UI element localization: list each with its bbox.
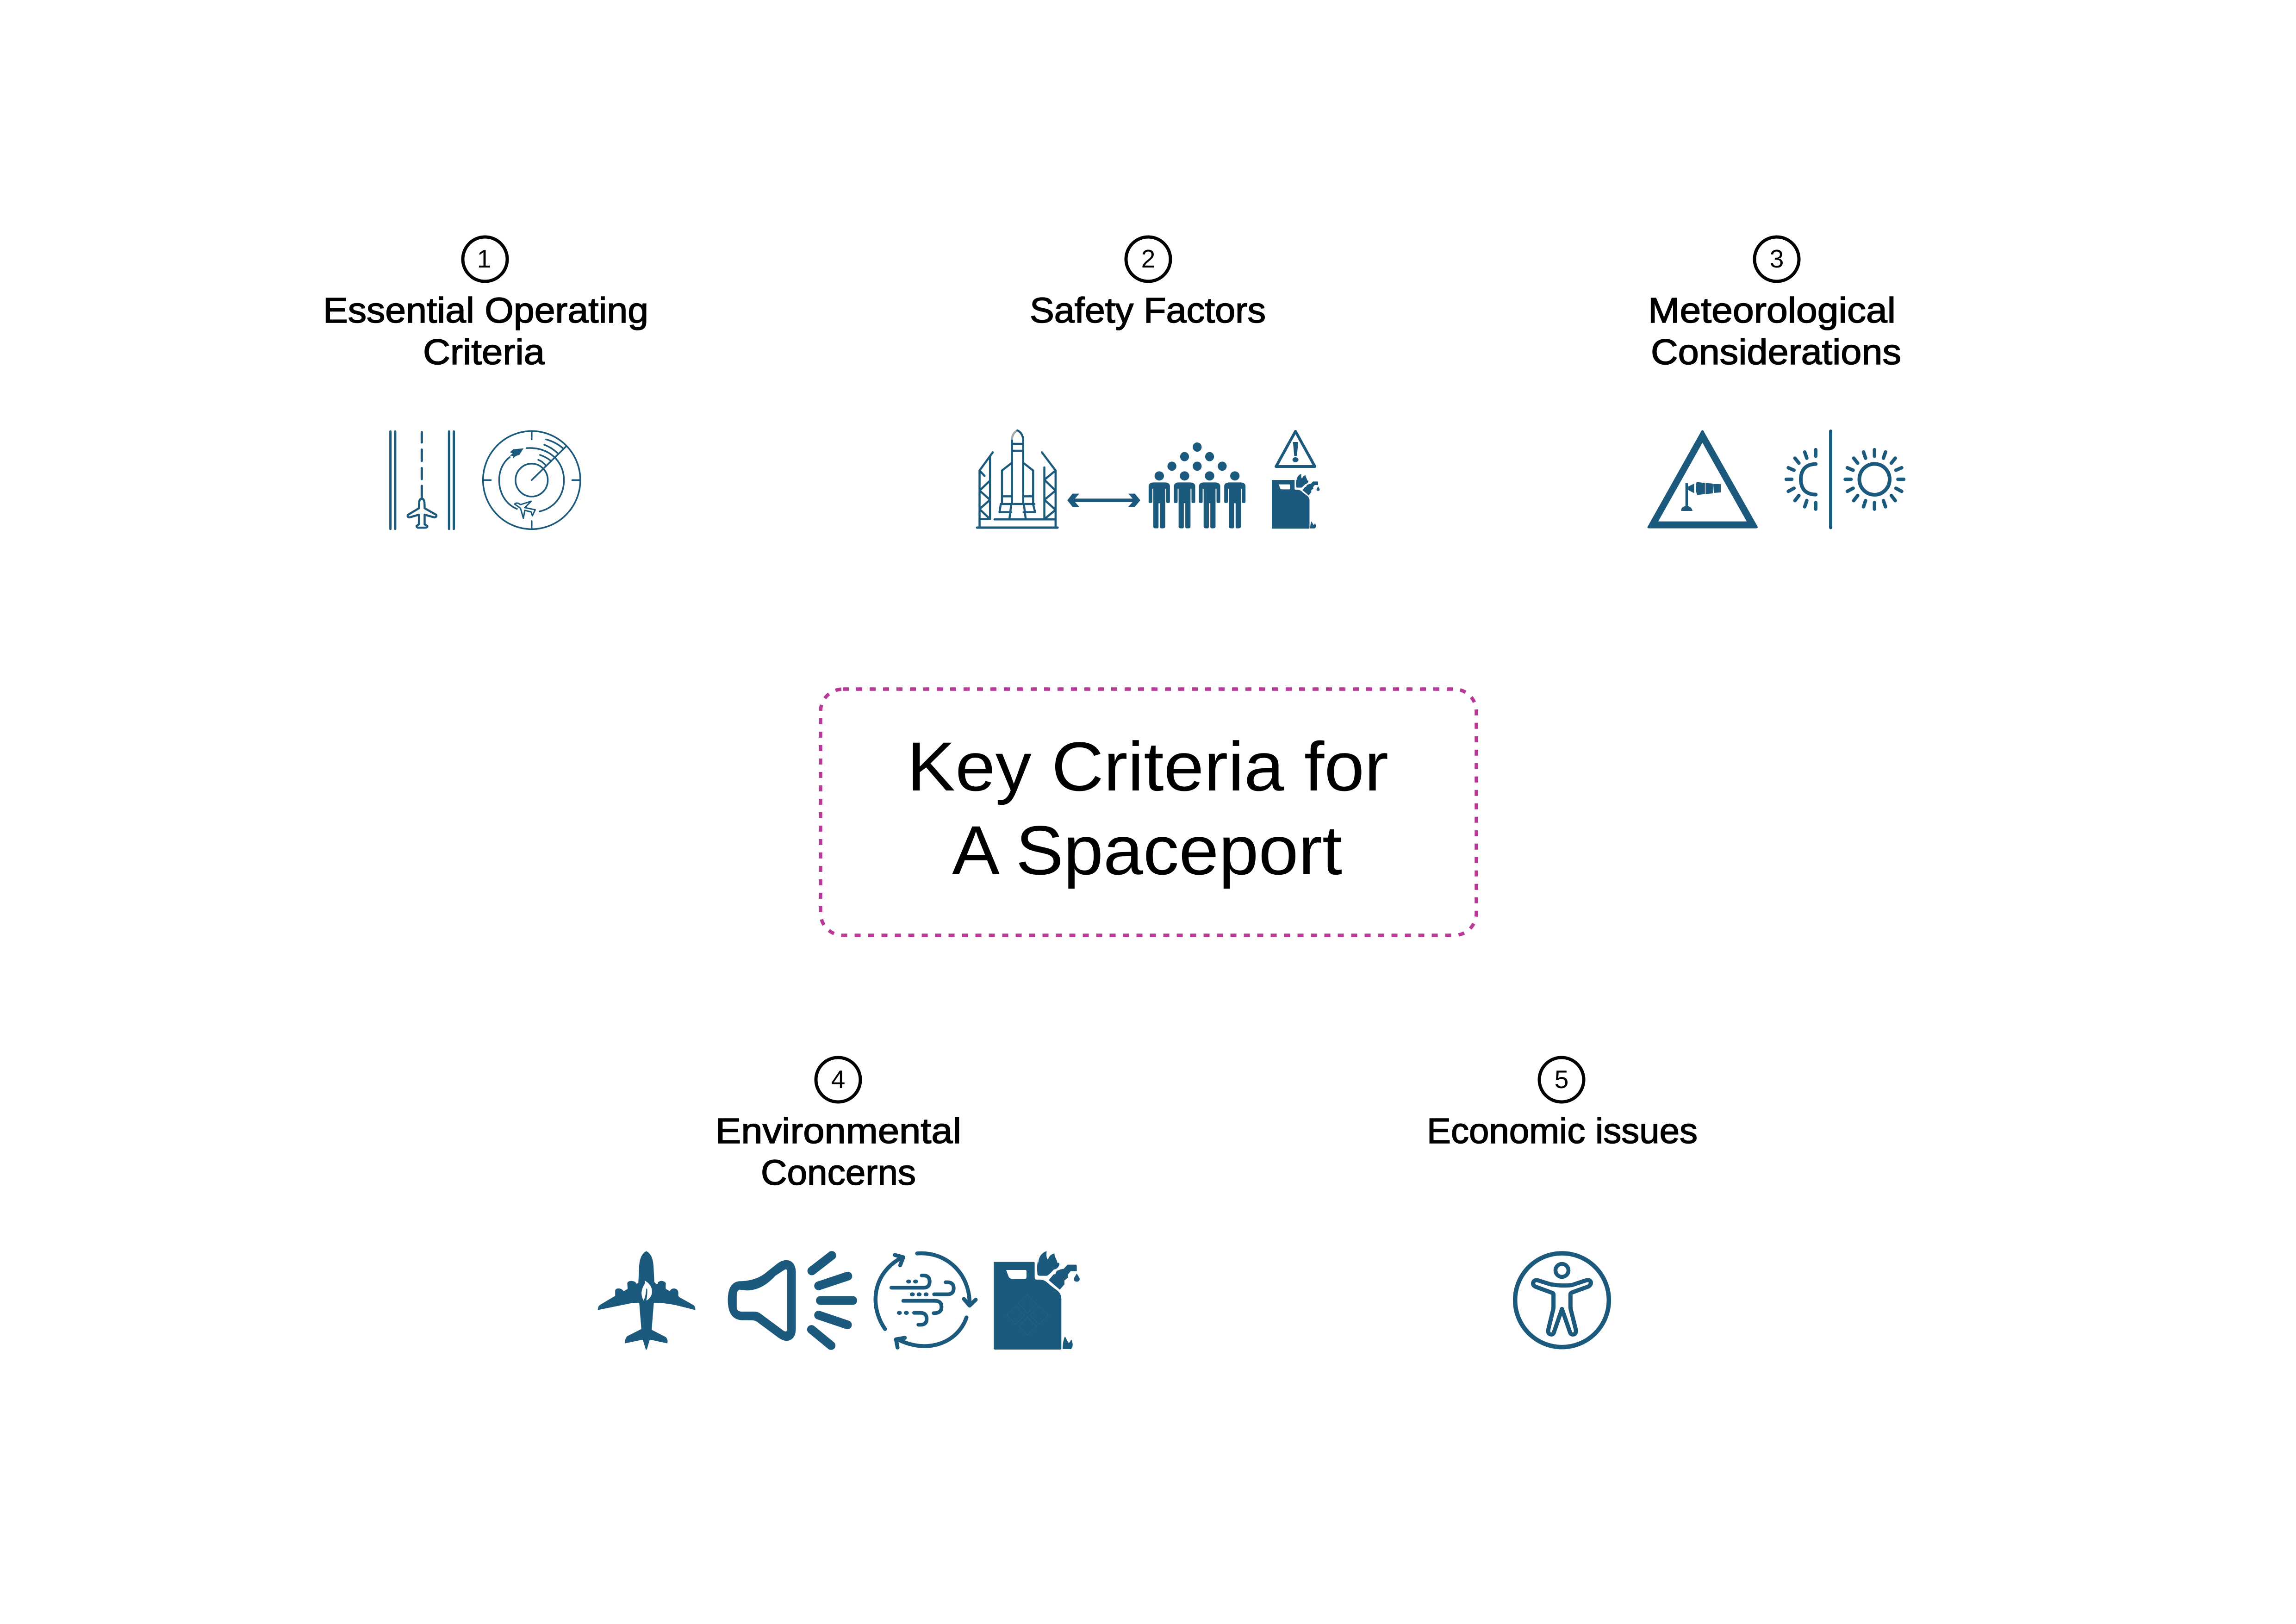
icon: loudspeaker noise — [728, 1256, 853, 1345]
number badge 2: 2 — [1141, 244, 1155, 273]
icon: rocket on launch pad — [977, 430, 1058, 528]
heading 1 — [323, 291, 648, 372]
arrow: double-headed distance — [1067, 494, 1140, 507]
heading 3: Considerations — [1651, 332, 1901, 372]
number badge 5 — [1539, 1058, 1584, 1102]
panel: 1 Essential Operating Criteria — [323, 237, 648, 529]
icon: runway with plane — [391, 431, 454, 529]
icon: night and day — [1786, 431, 1904, 528]
icon: crowd of people — [1149, 442, 1245, 529]
icon: burning fuel can large — [994, 1251, 1080, 1350]
heading 1: Essential Operating — [323, 291, 648, 330]
number badge 2 — [1126, 237, 1170, 281]
number badge 4 — [816, 1058, 860, 1102]
number badge 4: 4 — [831, 1065, 845, 1094]
icon: wind warning triangle — [1647, 430, 1758, 529]
number badge 5: 5 — [1555, 1065, 1568, 1094]
icon: burning fuel can — [1272, 474, 1320, 529]
panel: 3 Meteorological Considerations — [1647, 237, 1904, 529]
heading 5: Economic issues — [1427, 1111, 1698, 1151]
heading 1: Criteria — [423, 332, 545, 372]
title — [907, 728, 1388, 889]
heading 3 — [1648, 291, 1901, 372]
icon: radar — [483, 431, 580, 529]
panel: 5 Economic issues — [1427, 1058, 1698, 1347]
icon: wind cycle — [876, 1253, 976, 1348]
number badge 1 — [463, 237, 507, 281]
heading 2: Safety Factors — [1030, 291, 1266, 330]
icon: plane with leaf — [598, 1251, 695, 1350]
panel: central title box — [821, 689, 1476, 935]
heading 4 — [716, 1111, 961, 1193]
number badge 3: 3 — [1770, 244, 1784, 273]
number badge 1: 1 — [477, 244, 491, 273]
icon: warning triangle — [1276, 431, 1315, 467]
panel: 4 Environmental Concerns — [598, 1058, 1080, 1350]
panel: 2 Safety Factors — [977, 237, 1320, 529]
number badge 3 — [1755, 237, 1799, 281]
dotted rounded border — [821, 689, 1476, 935]
heading 4: Concerns — [761, 1153, 916, 1193]
heading 4: Environmental — [716, 1111, 961, 1151]
heading 3: Meteorological — [1648, 291, 1896, 330]
title: A Spaceport — [952, 811, 1342, 889]
title: Key Criteria for — [907, 728, 1388, 805]
icon: person in circle — [1515, 1253, 1609, 1347]
